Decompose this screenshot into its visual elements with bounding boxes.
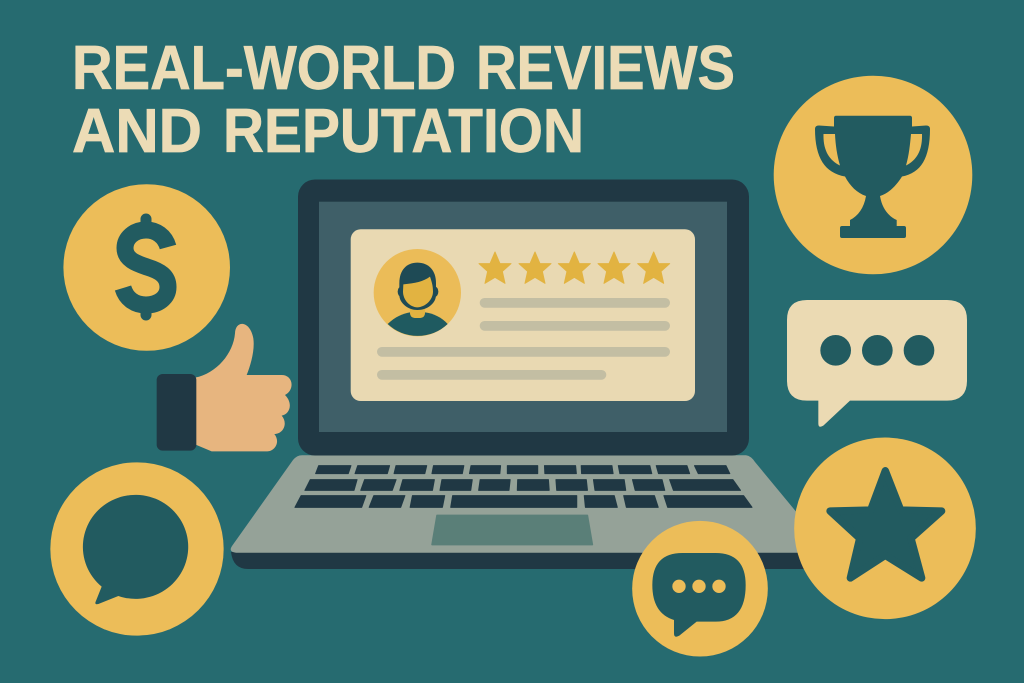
title: REAL-WORLD xyxy=(72,34,456,103)
title: REVIEWS xyxy=(476,34,735,103)
icon: thumbs up xyxy=(157,324,292,451)
title: AND xyxy=(72,97,202,166)
title xyxy=(72,34,735,166)
laptop base xyxy=(231,455,830,569)
trackpad xyxy=(432,515,592,545)
icon: trophy xyxy=(774,76,972,274)
icon: chat circle badge xyxy=(50,462,224,636)
five star rating xyxy=(479,252,670,283)
icon: dollar coin xyxy=(63,184,230,351)
keyboard keys xyxy=(295,466,752,507)
panel: review card xyxy=(351,229,695,401)
icon: star badge xyxy=(794,437,976,619)
laptop xyxy=(231,180,830,569)
icon: small chat badge xyxy=(632,521,768,656)
speech bubble with dots xyxy=(787,300,967,427)
review text lines xyxy=(377,298,670,380)
laptop display xyxy=(319,202,727,432)
laptop screen bezel xyxy=(298,180,749,456)
title: REPUTATION xyxy=(223,97,584,166)
avatar xyxy=(374,249,461,336)
